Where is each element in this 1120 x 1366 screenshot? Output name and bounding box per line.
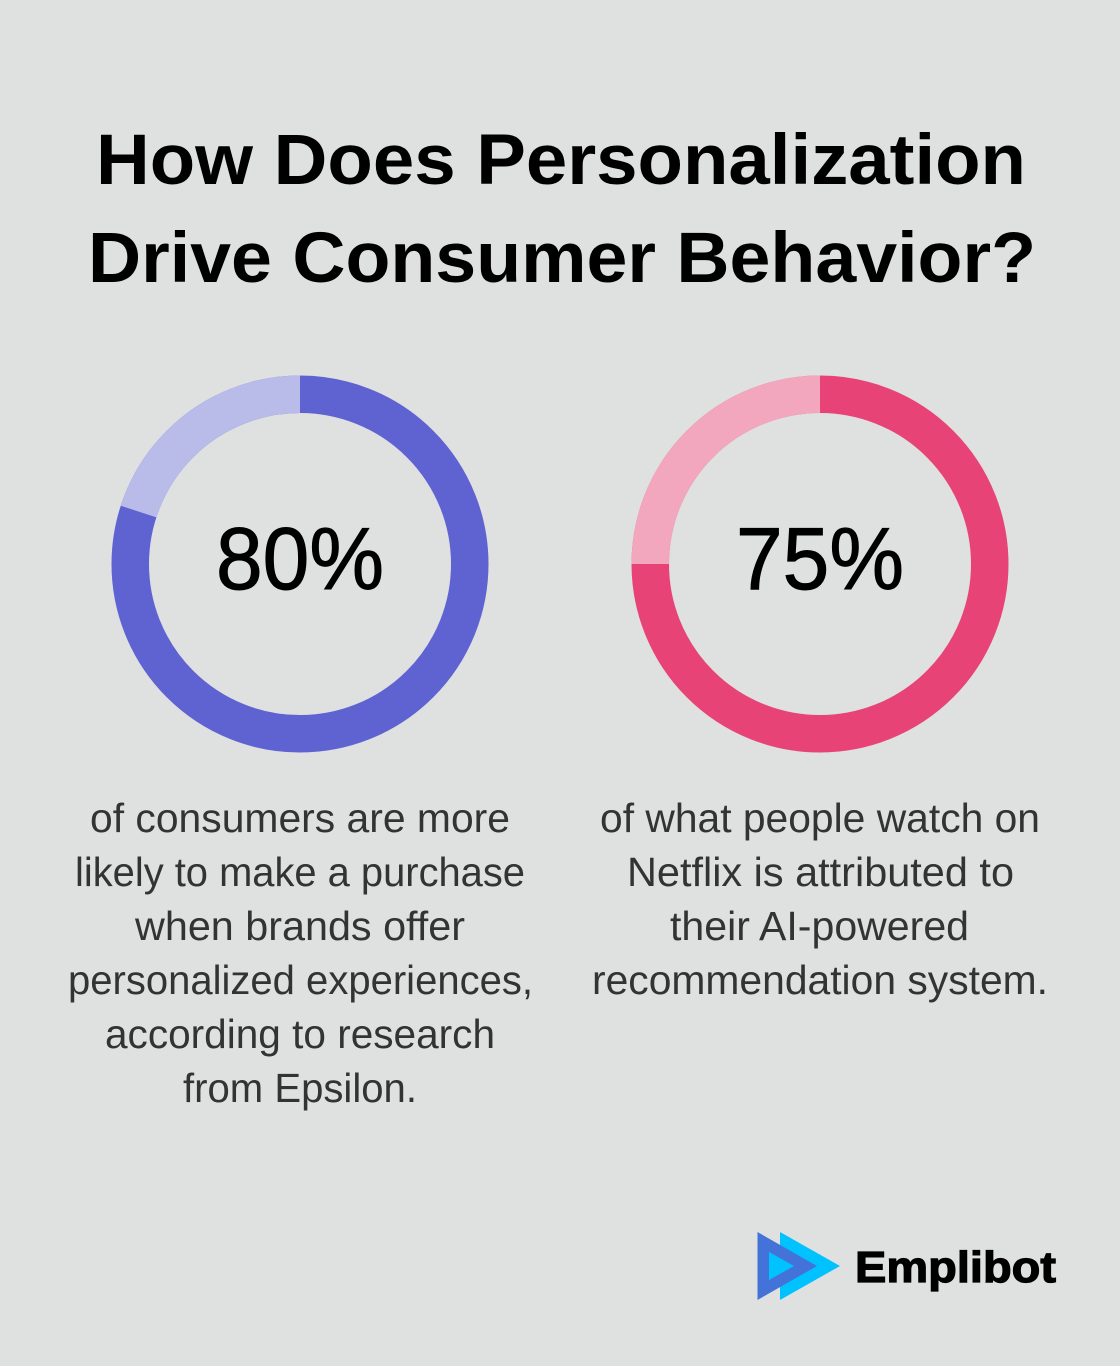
value: 80%: 80% — [216, 509, 384, 608]
description: 80%: of consumers are more — [90, 795, 510, 841]
description: 75% — [592, 795, 1048, 1003]
value: 75%: 75% — [736, 509, 904, 608]
description: 80%: when brands offer — [134, 903, 465, 949]
description: 75%: of what people watch on — [600, 795, 1040, 841]
panel: 75% statistic — [592, 394, 1048, 1003]
logo: Emplibot — [758, 1232, 1056, 1300]
icon: play triangles — [758, 1232, 840, 1300]
description: 80%: from Epsilon. — [183, 1065, 417, 1111]
title: How Does Personalization — [96, 121, 1026, 200]
title — [88, 121, 1036, 298]
donut chart: 75% — [650, 394, 990, 734]
logo wordmark: Emplibot — [855, 1243, 1056, 1292]
description: 75%: Netflix is attributed to — [627, 849, 1014, 895]
donut chart: 80% — [130, 394, 470, 734]
description: 80%: personalized experiences, — [68, 957, 533, 1003]
description: 80%: likely to make a purchase — [75, 849, 525, 895]
title: Drive Consumer Behavior? — [88, 219, 1036, 298]
description: 80% — [68, 795, 533, 1111]
description: 80%: according to research — [105, 1011, 495, 1057]
panel: 80% statistic — [68, 394, 533, 1111]
description: 75%: their AI-powered — [670, 903, 969, 949]
description: 75%: recommendation system. — [592, 957, 1048, 1003]
